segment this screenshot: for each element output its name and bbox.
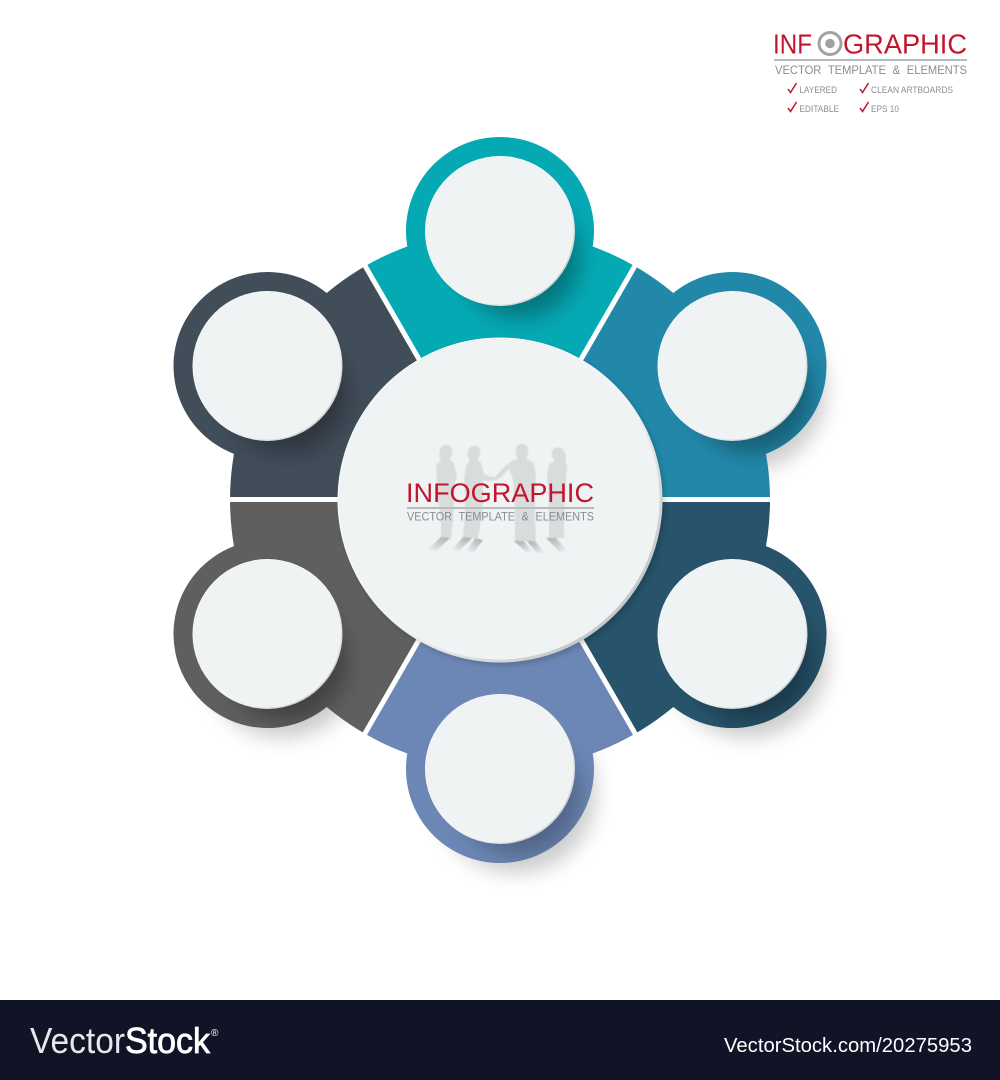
footer logo: Vector [30, 1020, 125, 1061]
person 4 [547, 447, 567, 538]
feature list: EDITABLE [800, 104, 839, 114]
feature list: EPS 10 [871, 104, 899, 114]
person 1 [436, 445, 457, 539]
segment: top teal [365, 137, 635, 500]
feature list [800, 85, 953, 114]
central heading: INFOGRAPHIC [406, 478, 594, 508]
feature list: LAYERED [800, 85, 837, 95]
segment: upper right blue [500, 266, 826, 500]
footer url: VectorStock.com/20275953 [724, 1035, 972, 1057]
node circle: top [425, 156, 575, 306]
node circle: lower right [658, 559, 808, 709]
logo heading end: GRAPHIC [843, 28, 967, 60]
feature list: CLEAN ARTBOARDS [871, 85, 953, 95]
node circle: upper left [192, 291, 342, 441]
logo rule [774, 59, 967, 61]
check icons [788, 83, 868, 112]
silhouettes of four people [427, 444, 568, 553]
central rule [407, 507, 594, 509]
top right logo [773, 28, 967, 114]
node circle: upper right [658, 291, 808, 441]
outer drop shadows [203, 310, 828, 873]
inner shadows on segments [227, 198, 812, 856]
footer logo: Stock [125, 1020, 211, 1061]
segment: upper left slate [174, 266, 500, 500]
central circle [338, 338, 665, 665]
segment: bottom periwinkle [365, 500, 635, 863]
logo target icon [819, 32, 841, 54]
person 2 [463, 446, 498, 538]
person 3 [496, 444, 536, 541]
node circle: lower left [192, 559, 342, 709]
footer logo: ® [211, 1028, 219, 1039]
footer logo [30, 1020, 219, 1061]
node circle: bottom [425, 694, 575, 844]
footer bar [0, 1000, 1000, 1080]
segment: lower left grey [174, 500, 500, 734]
logo heading start: INF [773, 28, 812, 60]
logo subheading: VECTOR TEMPLATE & ELEMENTS [775, 63, 967, 77]
segment: lower right navy [500, 500, 826, 734]
central subheading: VECTOR TEMPLATE & ELEMENTS [407, 510, 594, 524]
white gaps between segments [210, 248, 790, 751]
person feet shadows [427, 537, 568, 553]
